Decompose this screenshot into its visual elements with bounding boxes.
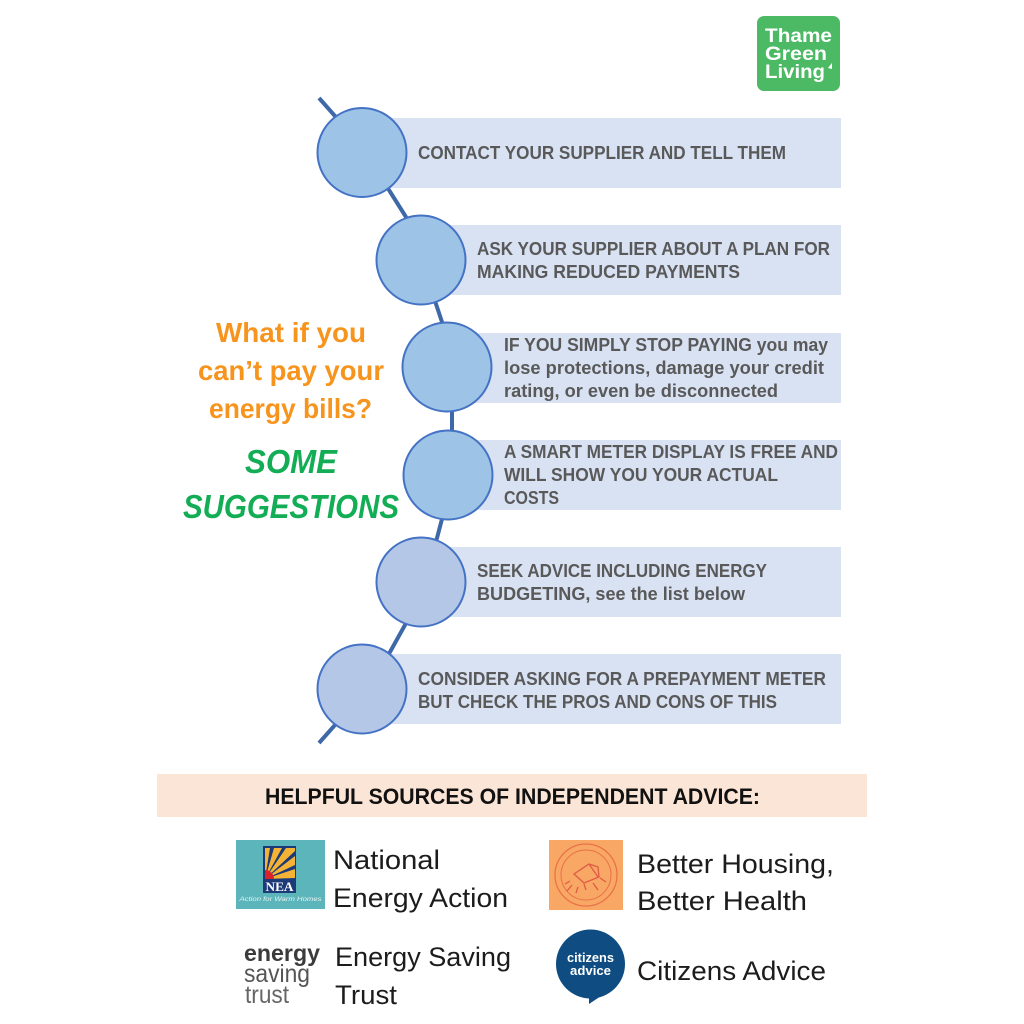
label: Energy Saving Trust: Trust xyxy=(335,980,398,1010)
label: Better Housing, Better Health: Better Housing, xyxy=(637,849,834,879)
label: Better Housing, Better Health xyxy=(637,849,834,916)
step 2 xyxy=(376,216,841,304)
step 3: IF YOU SIMPLY STOP PAYING you may xyxy=(504,335,828,355)
step 3: rating, or even be disconnected xyxy=(504,381,778,401)
step 4: COSTS xyxy=(504,488,559,508)
step 3: lose protections, damage your credit xyxy=(504,358,824,378)
heading: What if you can't pay your energy bills?: energy bills? xyxy=(209,393,372,424)
step 4: WILL SHOW YOU YOUR ACTUAL xyxy=(504,465,778,485)
logo: energy saving trust xyxy=(244,940,320,1009)
banner: helpful sources: HELPFUL SOURCES OF INDEPENDENT ADVICE: xyxy=(265,784,760,809)
label: National Energy Action: National xyxy=(333,845,440,875)
subheading: Some suggestions: SUGGESTIONS xyxy=(183,488,399,525)
label: Energy Saving Trust xyxy=(335,942,511,1010)
step 2: MAKING REDUCED PAYMENTS xyxy=(477,262,740,282)
heading: What if you can't pay your energy bills?: What if you xyxy=(216,317,366,348)
logo: energy saving trust: saving xyxy=(244,960,310,988)
logo: Citizens Advice: advice xyxy=(570,964,611,978)
step 6: CONSIDER ASKING FOR A PREPAYMENT METER xyxy=(418,669,826,689)
logo: Thame Green Living: Living xyxy=(765,61,825,83)
step 5: SEEK ADVICE INCLUDING ENERGY xyxy=(477,561,767,581)
logo: Citizens Advice: citizens xyxy=(567,951,614,965)
step 1: CONTACT YOUR SUPPLIER AND TELL THEM xyxy=(418,143,786,163)
timeline spine xyxy=(319,98,452,743)
step 4: A SMART METER DISPLAY IS FREE AND xyxy=(504,442,838,462)
label: Citizens Advice: Citizens Advice xyxy=(637,956,826,986)
step 6: BUT CHECK THE PROS AND CONS OF THIS xyxy=(418,692,777,712)
step 5 xyxy=(376,538,841,626)
logo: Citizens Advice xyxy=(556,930,625,1004)
logo: National Energy Action: Action for Warm Homes xyxy=(238,896,322,903)
heading: What if you can't pay your energy bills?: can’t pay your xyxy=(198,355,384,386)
logo: Thame Green Living: Thame xyxy=(765,25,832,47)
logo: Better Housing, Better Health xyxy=(549,840,623,910)
logo: energy saving trust: energy xyxy=(244,940,320,966)
logo: National Energy Action: NEA xyxy=(266,880,294,894)
subheading: Some suggestions xyxy=(183,443,399,525)
step 4 xyxy=(404,430,841,520)
label: Energy Saving Trust: Energy Saving xyxy=(335,942,511,972)
subheading: Some suggestions: SOME xyxy=(245,443,338,480)
step 3 xyxy=(402,322,841,412)
label: National Energy Action: Energy Action xyxy=(333,883,508,913)
logo: energy saving trust: trust xyxy=(245,981,289,1009)
label: National Energy Action xyxy=(333,845,508,913)
heading: What if you can't pay your energy bills? xyxy=(198,317,384,424)
step 2: ASK YOUR SUPPLIER ABOUT A PLAN FOR xyxy=(477,239,830,259)
banner: helpful sources xyxy=(157,774,867,817)
step 6 xyxy=(318,644,841,734)
step 5: BUDGETING, see the list below xyxy=(477,584,746,604)
step 1 xyxy=(318,108,841,197)
logo: Thame Green Living xyxy=(757,16,840,91)
label: Better Housing, Better Health: Better Health xyxy=(637,886,807,916)
logo: Thame Green Living: Green xyxy=(765,43,827,65)
logo: National Energy Action xyxy=(236,840,325,909)
